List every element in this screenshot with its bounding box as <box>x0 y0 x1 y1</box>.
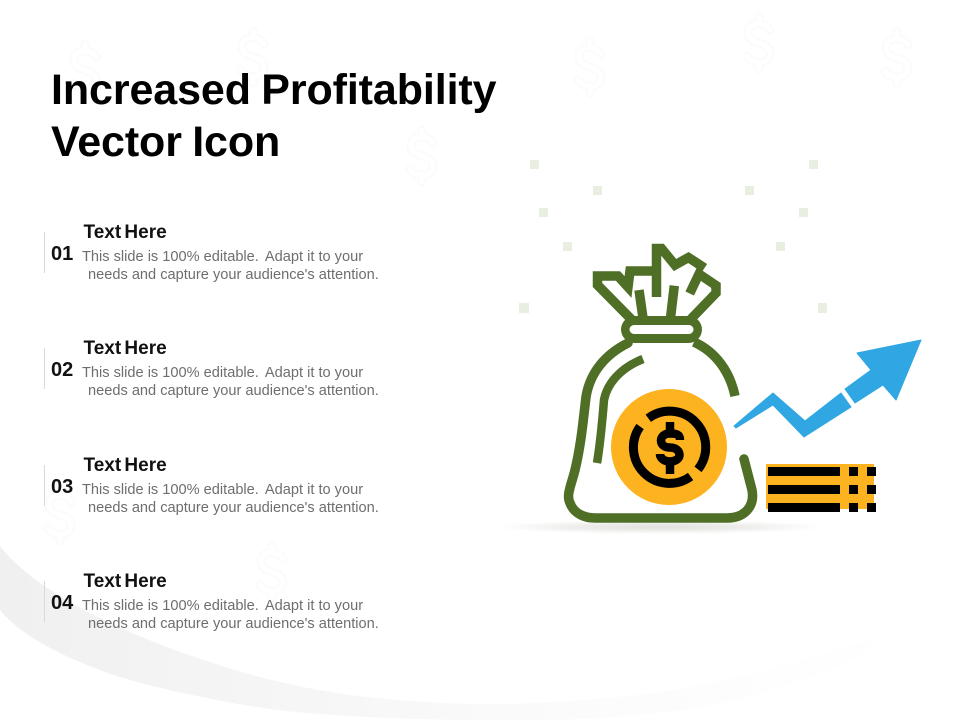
list item 01 <box>44 222 379 283</box>
list item 03: This slide is 100% editable. Adapt it to your <box>82 482 363 498</box>
list item 01: This slide is 100% editable. Adapt it to your <box>82 249 363 265</box>
dollar sign <box>660 434 680 462</box>
list item 04: This slide is 100% editable. Adapt it to your <box>82 598 363 614</box>
ground shadow <box>495 520 825 534</box>
list item 04: Text Here <box>84 571 167 592</box>
list item 01: Text Here <box>84 222 167 243</box>
list item 02: needs and capture your audience's attention. <box>88 383 379 399</box>
bag tie <box>621 316 702 343</box>
list item 02: 02 <box>51 359 73 381</box>
coin ring <box>648 411 706 469</box>
watermark dollars <box>48 17 908 598</box>
list item 02: This slide is 100% editable. Adapt it to your <box>82 365 363 381</box>
list item 04 <box>44 571 379 632</box>
list item 02: Text Here <box>84 338 167 359</box>
bag highlight <box>597 359 643 463</box>
title: Increased Profitability <box>51 66 496 114</box>
icon: money bag <box>569 248 753 518</box>
bag top tuft <box>598 248 716 320</box>
bag body <box>569 342 753 518</box>
title: Vector Icon <box>51 118 280 166</box>
list item 04: 04 <box>51 592 73 614</box>
list item 03: 03 <box>51 476 73 498</box>
list item 01: 01 <box>51 243 73 265</box>
icon: dollar coin <box>611 389 727 505</box>
list item 03: Text Here <box>84 455 167 476</box>
list item 04: needs and capture your audience's attention. <box>88 616 379 632</box>
list item 03: needs and capture your audience's attention. <box>88 500 379 516</box>
bottom swoosh <box>0 546 912 720</box>
icon: striped banknotes <box>766 464 876 512</box>
list item 01: needs and capture your audience's attention. <box>88 267 379 283</box>
title <box>51 66 496 166</box>
icon: rising arrow <box>734 340 921 437</box>
scattered green squares <box>519 160 827 313</box>
list item 03 <box>44 455 379 516</box>
list item 02 <box>44 338 379 399</box>
